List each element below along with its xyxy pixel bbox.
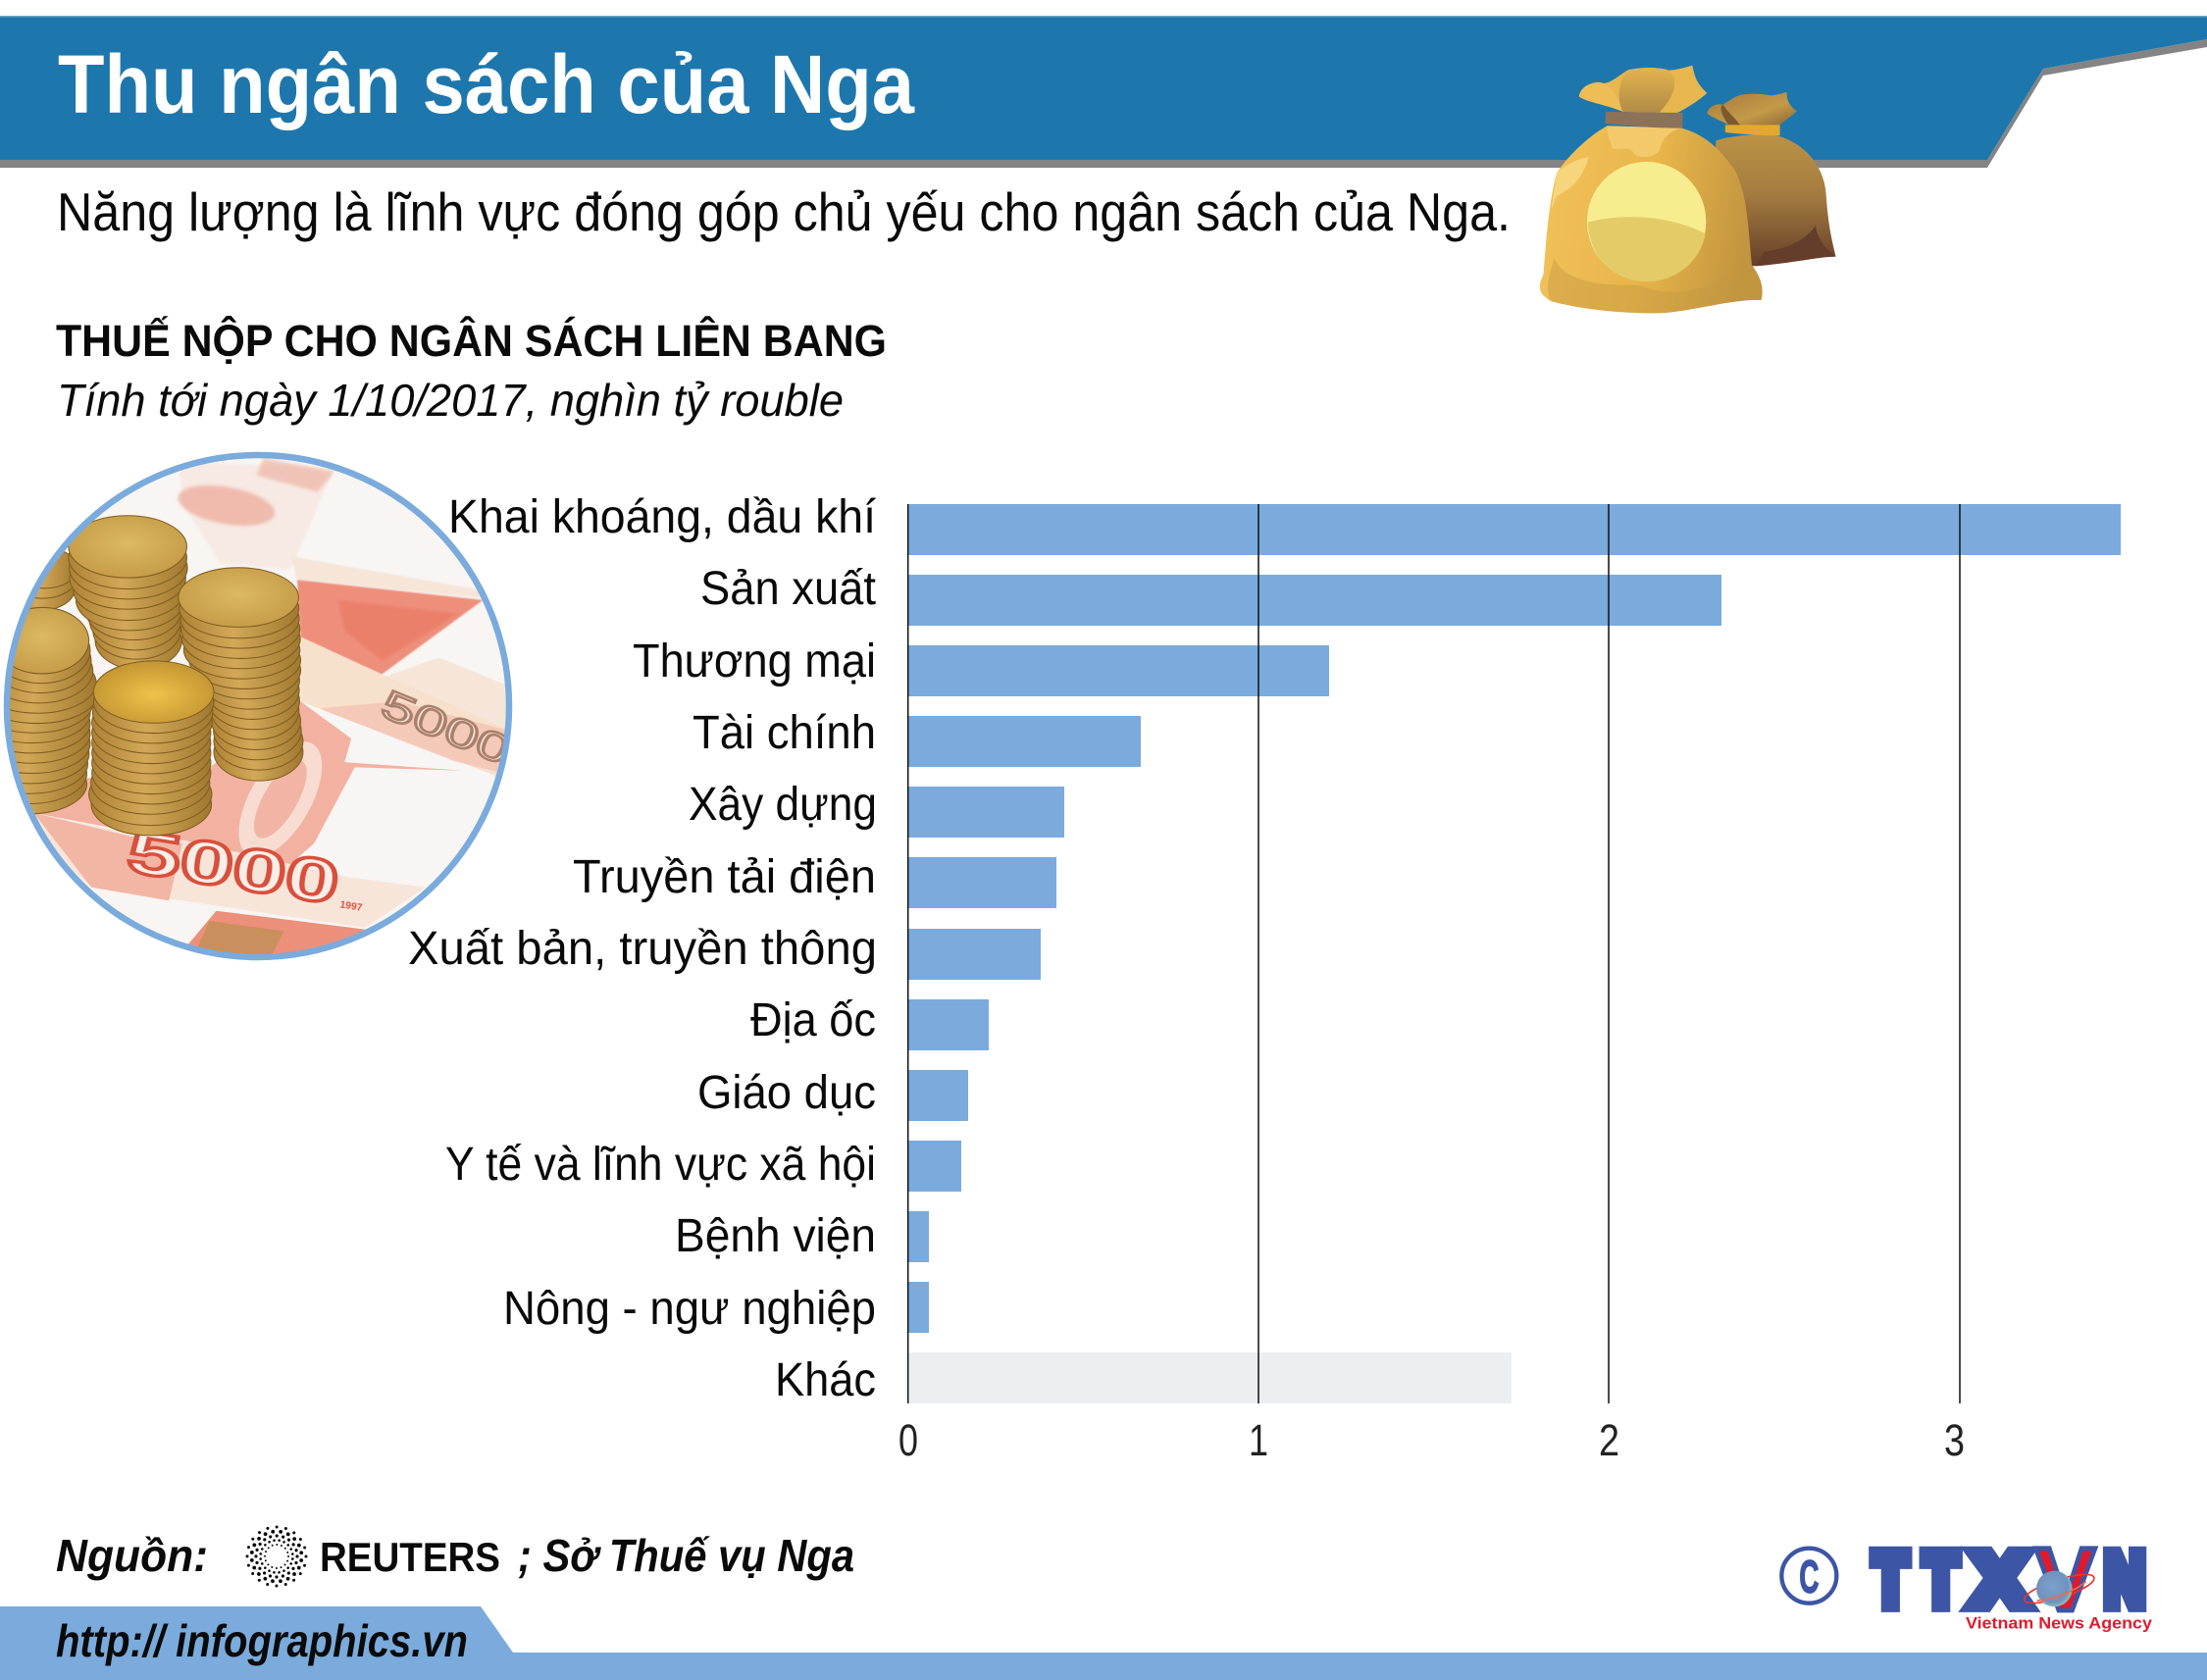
coin stack left [10, 606, 96, 814]
axis labels: 2 [1599, 1415, 1619, 1465]
photo: coins and rouble notes: 1997 [339, 899, 363, 914]
title: Thu ngân sách của Nga [58, 38, 915, 130]
axis labels [898, 1415, 1965, 1465]
agency letters [1873, 1540, 2145, 1622]
photo: coins and rouble notes: 5000 [375, 682, 517, 774]
source line: REUTERS [320, 1534, 500, 1580]
category labels: Địa ốc [750, 994, 876, 1046]
category labels: Sản xuất [700, 563, 876, 615]
category labels: Y tế và lĩnh vực xã hội [445, 1139, 876, 1191]
photo: coins and rouble notes [0, 451, 520, 966]
section subheading: Tính tới ngày 1/10/2017, nghìn tỷ rouble [57, 375, 844, 426]
category labels: Xuất bản, truyền thông [408, 923, 877, 975]
category labels: Nông - ngư nghiệp [503, 1283, 876, 1335]
coin stack back [69, 516, 187, 669]
logo: TTXVN [1781, 1530, 2153, 1633]
axis labels: 0 [898, 1415, 918, 1465]
source line [56, 1527, 854, 1586]
coin stack front [89, 661, 214, 836]
small bag [1707, 92, 1836, 266]
category labels: Khác [775, 1354, 876, 1406]
globe [2022, 1569, 2097, 1608]
header banner [0, 16, 2207, 168]
bars [908, 504, 2121, 1403]
icon: money bags [1540, 66, 1836, 313]
coin stack back left [30, 551, 75, 608]
agency letters: N [2105, 1540, 2145, 1622]
source line: Nguồn: [56, 1530, 208, 1581]
section heading: THUẾ NỘP CHO NGÂN SÁCH LIÊN BANG [56, 316, 887, 366]
logo: TTXVN: Vietnam News Agency [1966, 1614, 2153, 1633]
subtitle: Năng lượng là lĩnh vực đóng góp chủ yếu cho ngân sách của Nga. [57, 181, 1511, 242]
category labels: Bệnh viện [675, 1210, 876, 1262]
agency letters: X [1973, 1540, 2027, 1622]
big bag [1540, 66, 1763, 313]
category labels [408, 491, 877, 1406]
category labels: Truyền tải điện [573, 851, 876, 903]
copyright mark: C [1799, 1551, 1819, 1602]
axis labels: 1 [1249, 1415, 1268, 1465]
banknote number: 5000 [123, 818, 343, 918]
category labels: Tài chính [693, 707, 876, 759]
coin stack right [179, 568, 303, 781]
copyright mark [1781, 1549, 1836, 1604]
bar chart [408, 491, 2121, 1465]
icon: Reuters dot ring [247, 1527, 306, 1586]
agency letters: T [1873, 1540, 1908, 1622]
agency letters: T [1924, 1540, 1958, 1622]
category labels: Khai khoáng, dầu khí [448, 491, 877, 543]
footer band [0, 1606, 2207, 1680]
category labels: Thương mại [633, 636, 876, 687]
axis labels: 3 [1944, 1415, 1965, 1465]
source line: ; Sở Thuế vụ Nga [518, 1530, 854, 1581]
category labels: Xây dựng [689, 779, 877, 831]
gridlines [908, 504, 1960, 1403]
footer url: http:// infographics.vn [56, 1615, 468, 1666]
category labels: Giáo dục [697, 1067, 876, 1119]
letter V: V [2035, 1530, 2096, 1630]
